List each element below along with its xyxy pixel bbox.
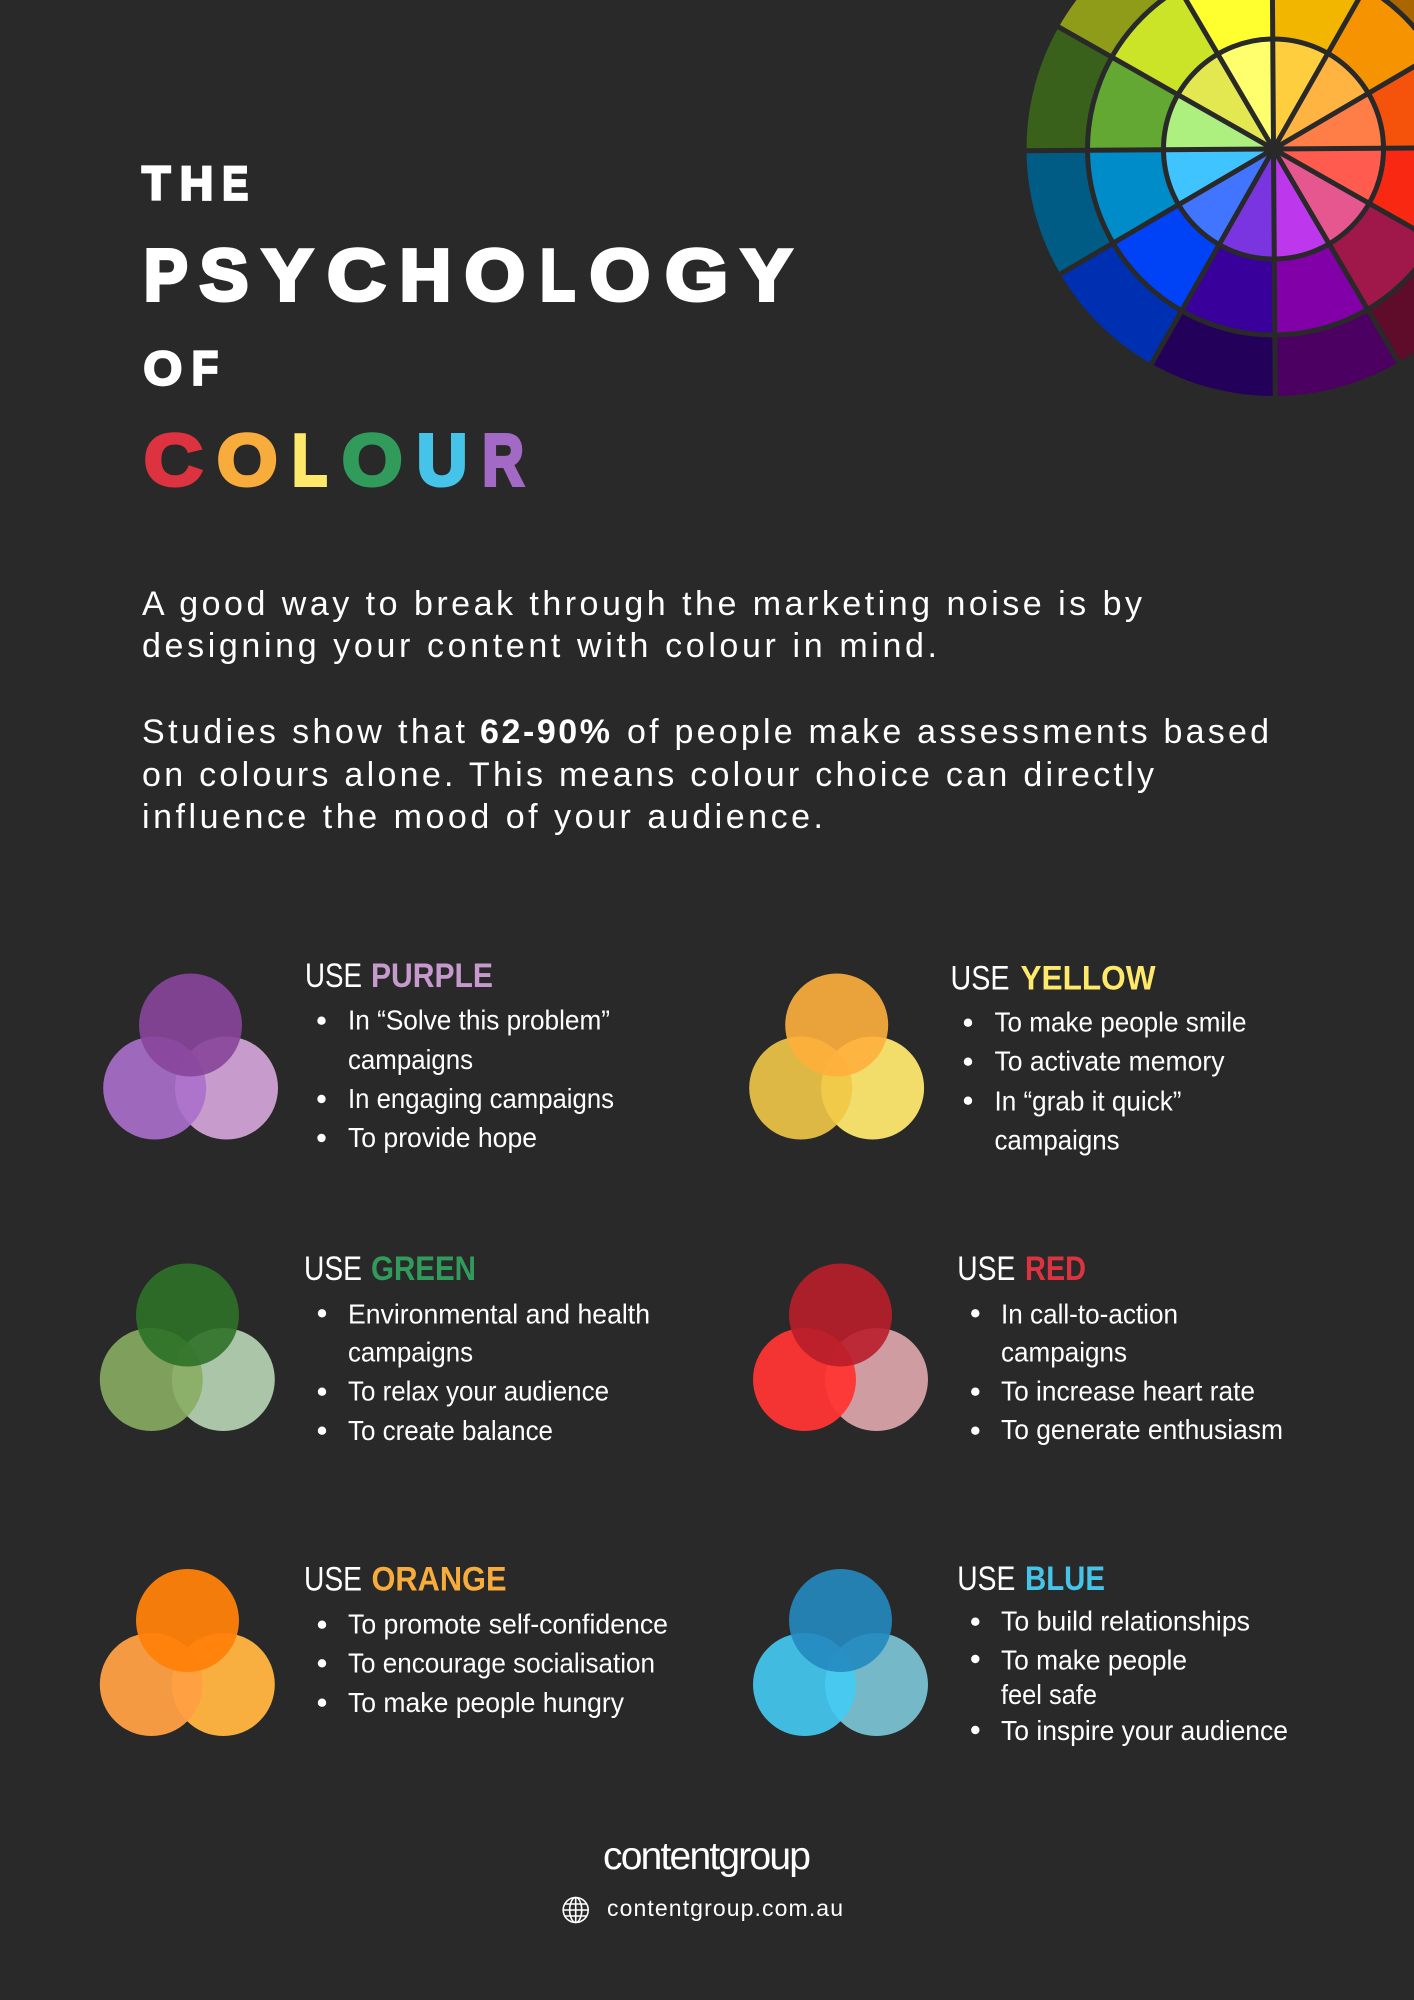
heading: use red: RED	[1025, 1250, 1086, 1288]
heading: use green: USE	[304, 1250, 362, 1288]
list: red uses	[971, 1298, 1283, 1445]
panel: use purple	[103, 957, 614, 1153]
list: yellow uses: To activate memory	[994, 1046, 1225, 1077]
icon: yellow circles	[749, 974, 924, 1140]
list: blue uses: feel safe	[1001, 1679, 1097, 1710]
icon: globe	[563, 1898, 588, 1922]
heading: use blue: BLUE	[1025, 1560, 1105, 1598]
statistic paragraph: of people make assessments based	[627, 713, 1269, 751]
title	[142, 156, 792, 501]
title line: PSYCHOLOGY: S	[200, 235, 248, 316]
intro paragraph	[142, 585, 1142, 665]
heading: use orange: ORANGE	[372, 1561, 506, 1599]
heading: use blue: USE	[957, 1560, 1015, 1598]
list: purple uses: In engaging campaigns	[348, 1083, 614, 1114]
list: blue uses	[971, 1606, 1288, 1746]
title line: OF: F	[192, 342, 218, 395]
panel: use yellow	[749, 959, 1246, 1155]
footer website address: contentgroup.com.au	[607, 1895, 843, 1921]
list: yellow uses: To make people smile	[994, 1007, 1246, 1038]
footer logo: contentgroup: contentgroup	[603, 1835, 811, 1878]
list: blue uses: To build relationships	[1001, 1606, 1250, 1637]
title line: COLOUR: O	[342, 419, 402, 500]
heading: use purple	[305, 957, 493, 995]
panel: use orange	[100, 1561, 668, 1736]
intro paragraph: designing your content with colour in mind.	[142, 627, 937, 665]
icon: green circles	[100, 1264, 275, 1431]
heading: use red: USE	[957, 1250, 1015, 1288]
title line: COLOUR: U	[417, 421, 467, 501]
icon: purple circles	[103, 974, 278, 1140]
title line: THE: T	[142, 156, 171, 210]
heading: use red	[957, 1250, 1086, 1288]
panel: use red	[753, 1250, 1283, 1445]
panel: use green	[100, 1250, 650, 1446]
statistic paragraph: on colours alone. This means colour choice can directly	[142, 756, 1154, 794]
title line: PSYCHOLOGY: Y	[262, 235, 313, 316]
title line: COLOUR: O	[217, 419, 277, 500]
list: orange uses: To encourage socialisation	[348, 1648, 655, 1679]
list: red uses: To generate enthusiasm	[1001, 1414, 1283, 1445]
title line: COLOUR: C	[144, 421, 202, 501]
title line: PSYCHOLOGY: G	[665, 236, 728, 316]
list: yellow uses	[964, 1007, 1246, 1155]
title line: PSYCHOLOGY: L	[540, 235, 575, 316]
intro paragraph: A good way to break through the marketing noise is by	[142, 585, 1142, 623]
title line: COLOUR: R	[482, 420, 524, 500]
list: yellow uses: campaigns	[994, 1124, 1120, 1155]
list: yellow uses: In “grab it quick”	[994, 1086, 1182, 1117]
list: green uses	[318, 1298, 650, 1446]
title line: THE: H	[180, 156, 213, 210]
heading: use orange	[304, 1561, 506, 1599]
statistic paragraph: 62-90%	[480, 713, 610, 751]
list: green uses: campaigns	[348, 1337, 473, 1368]
list: purple uses	[317, 1004, 614, 1153]
list: green uses: Environmental and health	[348, 1298, 650, 1329]
title line: PSYCHOLOGY	[144, 234, 792, 316]
title line: COLOUR	[144, 419, 524, 501]
heading: use purple: PURPLE	[371, 957, 493, 995]
title line: OF: O	[144, 342, 182, 395]
list: green uses: To create balance	[348, 1415, 553, 1446]
statistic paragraph: Studies show that	[142, 713, 466, 751]
heading: use orange: USE	[304, 1561, 362, 1599]
list: orange uses	[318, 1608, 668, 1718]
title line: PSYCHOLOGY: Y	[741, 235, 792, 316]
panel: use blue	[753, 1560, 1288, 1746]
heading: use green	[304, 1250, 476, 1288]
list: red uses: In call-to-action	[1001, 1298, 1178, 1329]
statistic paragraph: influence the mood of your audience.	[142, 798, 823, 836]
list: red uses: campaigns	[1001, 1337, 1127, 1368]
title line: COLOUR: L	[292, 420, 327, 501]
list: purple uses: To provide hope	[348, 1122, 537, 1153]
title line: OF	[144, 342, 218, 395]
list: purple uses: campaigns	[348, 1044, 473, 1075]
title line: THE: E	[222, 158, 248, 210]
colour wheel	[977, 0, 1414, 445]
heading: use green: GREEN	[371, 1250, 476, 1288]
icon: red circles	[753, 1264, 928, 1431]
list: blue uses: To inspire your audience	[1001, 1715, 1288, 1746]
title line: PSYCHOLOGY: P	[144, 235, 188, 316]
heading: use purple: USE	[305, 957, 362, 995]
statistic paragraph	[142, 713, 1269, 836]
list: orange uses: To make people hungry	[348, 1687, 624, 1718]
list: red uses: To increase heart rate	[1001, 1376, 1255, 1407]
heading: use blue	[957, 1560, 1105, 1598]
title line: PSYCHOLOGY: H	[400, 235, 451, 316]
heading: use yellow	[950, 959, 1156, 997]
title line: PSYCHOLOGY: O	[465, 234, 525, 315]
title line: THE	[142, 156, 248, 210]
icon: orange circles	[100, 1569, 275, 1736]
title line: PSYCHOLOGY: C	[327, 236, 386, 316]
list: purple uses: In “Solve this problem”	[348, 1004, 610, 1035]
heading: use yellow: USE	[950, 959, 1010, 997]
list: blue uses: To make people	[1001, 1644, 1187, 1675]
list: green uses: To relax your audience	[348, 1376, 609, 1407]
list: orange uses: To promote self-confidence	[348, 1608, 668, 1639]
title line: PSYCHOLOGY: O	[590, 234, 650, 315]
heading: use yellow: YELLOW	[1020, 959, 1156, 997]
icon: blue circles	[753, 1569, 928, 1736]
